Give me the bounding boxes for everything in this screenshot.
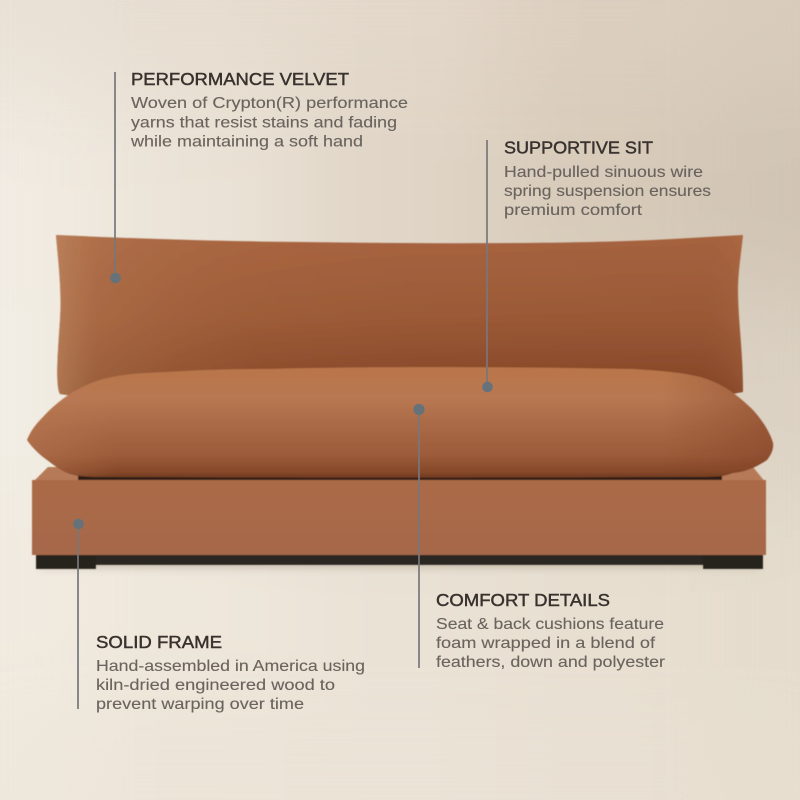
body text: Woven of Crypton(R) performance xyxy=(131,95,408,112)
callout: comfort details xyxy=(413,404,665,671)
seat cushion xyxy=(27,367,773,478)
callout: supportive sit xyxy=(482,138,711,392)
body text xyxy=(130,95,408,150)
sofa base frame xyxy=(32,467,766,555)
body text: while maintaining a soft hand xyxy=(130,134,363,150)
body text: premium comfort xyxy=(504,202,643,219)
heading: SUPPORTIVE SIT xyxy=(504,138,653,158)
leader line and dot xyxy=(73,519,84,709)
body text: feathers, down and polyester xyxy=(436,654,665,671)
heading: PERFORMANCE VELVET xyxy=(131,69,349,89)
body text: kiln-dried engineered wood to xyxy=(96,677,335,694)
heading: COMFORT DETAILS xyxy=(436,590,610,610)
body text: spring suspension ensures xyxy=(504,183,711,200)
body text: yarns that resist stains and fading xyxy=(131,114,397,132)
body text: prevent warping over time xyxy=(96,696,304,713)
sofa xyxy=(27,235,773,569)
body text: Hand-pulled sinuous wire xyxy=(504,164,703,181)
callout: performance velvet xyxy=(110,69,408,283)
body text: Hand-assembled in America using xyxy=(96,658,365,675)
back cushion xyxy=(56,235,743,400)
heading: SOLID FRAME xyxy=(96,632,222,652)
body text: foam wrapped in a blend of xyxy=(436,635,656,652)
leader line and dot xyxy=(482,140,493,392)
body text xyxy=(96,658,365,713)
body text: Seat & back cushions feature xyxy=(436,616,664,633)
sofa legs and under-shadow xyxy=(36,553,763,569)
leader line and dot xyxy=(413,404,425,668)
callout: solid frame xyxy=(73,519,365,713)
leader line and dot xyxy=(110,72,121,283)
body text xyxy=(436,616,665,671)
body text xyxy=(504,164,711,219)
floor shadow under sofa xyxy=(40,560,760,568)
